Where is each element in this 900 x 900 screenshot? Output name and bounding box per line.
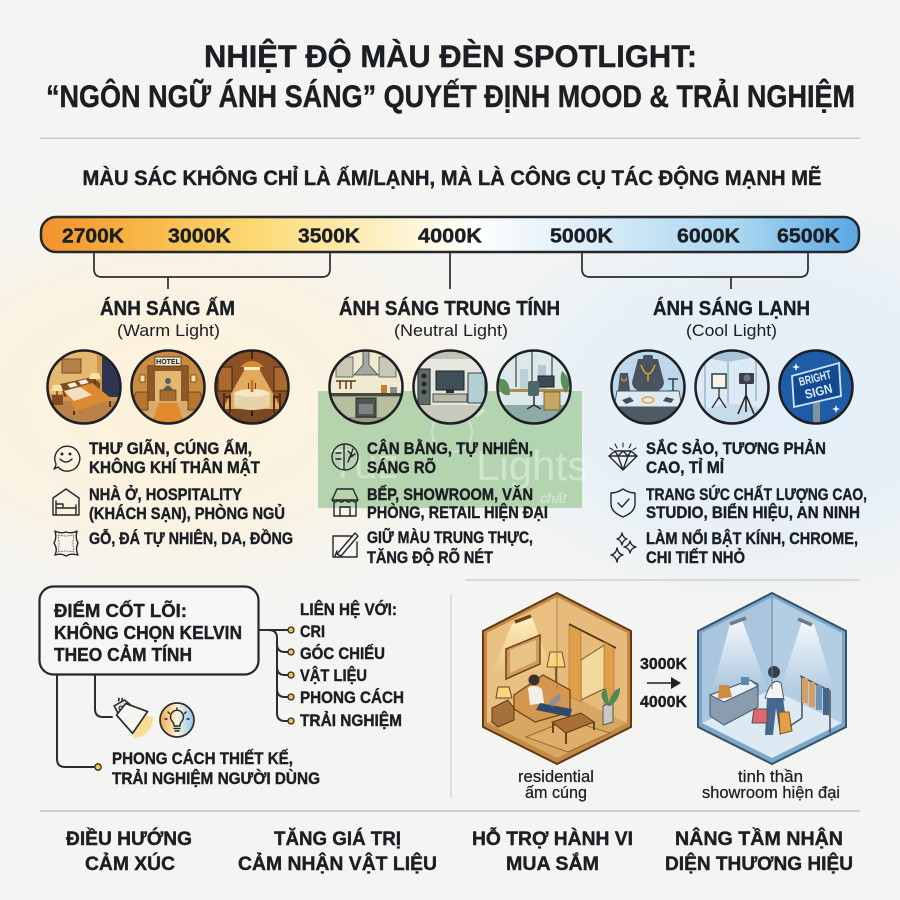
list: related factors: VẬT LIỆU <box>300 666 367 685</box>
title: NHIỆT ĐỘ MÀU ĐÈN SPOTLIGHT: <box>204 38 697 74</box>
text: cool light benefits: LÀM NỔI BẬT KÍNH, CHROME, <box>646 529 858 548</box>
heading: cool light: (Cool Light) <box>686 321 777 340</box>
footer benefits: CẢM XÚC <box>85 851 175 875</box>
text: neutral light benefits <box>367 439 548 567</box>
callout: key point <box>40 586 258 674</box>
text: design style and user experience: PHONG CÁCH THIẾT KẾ, <box>112 749 293 768</box>
heading: cool light <box>653 297 810 340</box>
text: cool light benefits: SẮC SẢO, TƯƠNG PHẢN <box>646 439 826 458</box>
label: 3000K to 4000K: 4000K <box>640 694 687 711</box>
subtitle: MÀU SÁC KHÔNG CHỈ LÀ ẤM/LẠNH, MÀ LÀ CÔNG CỤ TÁC ĐỘNG MẠNH MẼ <box>82 166 822 190</box>
heading: warm light: ÁNH SÁNG ẤM <box>100 297 235 320</box>
text: design style and user experience <box>112 749 320 788</box>
text: neutral light benefits: TĂNG ĐỘ RÕ NÉT <box>367 547 493 567</box>
color temperature scale bar: 2700K <box>62 224 124 248</box>
text: warm light benefits: GỖ, ĐÁ TỰ NHIÊN, DA, ĐỒNG <box>89 529 293 548</box>
footer benefits: TĂNG GIÁ TRỊ <box>274 827 401 850</box>
text: neutral light benefits: PHÒNG, RETAIL HIỆN ĐẠI <box>367 503 548 522</box>
text: neutral light benefits: BẾP, SHOWROOM, VĂN <box>367 485 533 504</box>
icon: smile bubble <box>54 446 80 471</box>
caption: residential: residential <box>518 768 594 786</box>
footer benefits: DIỆN THƯƠNG HIỆU <box>665 851 853 875</box>
icon: storefront <box>332 489 358 516</box>
icon: color pencil <box>333 533 358 557</box>
caption: modern showroom <box>702 768 840 802</box>
color temperature scale bar: 5000K <box>550 224 613 248</box>
watermark <box>318 391 588 508</box>
callout: key point: ĐIỂM CỐT LÕI: <box>54 600 187 621</box>
text: warm light benefits <box>89 438 293 548</box>
text: neutral light benefits: GIỮ MÀU TRUNG THỰC, <box>367 527 533 547</box>
heading: neutral light: (Neutral Light) <box>394 321 508 340</box>
color temperature scale bar: 6000K <box>677 224 740 248</box>
scene: photo studio <box>695 350 769 424</box>
list: related factors: TRẢI NGHIỆM <box>300 711 402 730</box>
icon: house with bed <box>53 489 79 515</box>
text: neutral light benefits: SÁNG RÕ <box>367 457 436 477</box>
illustration: modern showroom <box>698 593 846 764</box>
heading: neutral light <box>339 297 560 340</box>
title <box>46 38 855 114</box>
list: related factors: LIÊN HỆ VỚI: <box>300 600 397 619</box>
panel: cool light <box>609 297 867 567</box>
caption: modern showroom: tinh thần <box>738 768 803 786</box>
footer benefits: HỖ TRỢ HÀNH VI <box>472 826 633 850</box>
scene: hotel lobby <box>131 350 205 424</box>
icon: leather hide <box>54 531 78 556</box>
icon: sparkles <box>611 533 636 562</box>
icon: shield check <box>611 489 635 517</box>
range brackets <box>94 252 808 289</box>
icon: spotlight lamp <box>114 698 153 738</box>
text: neutral light benefits: CÂN BẰNG, TỰ NHIÊN, <box>367 439 533 458</box>
scene: bright sign: BRIGHT <box>797 367 833 389</box>
list: related factors: PHONG CÁCH <box>300 688 404 707</box>
scene: showroom living <box>413 350 487 424</box>
list: related factors: GÓC CHIẾU <box>300 644 385 663</box>
heading: warm light <box>100 297 235 340</box>
footer benefits: CẢM NHẬN VẬT LIỆU <box>238 851 437 875</box>
scene: bright sign <box>779 350 853 425</box>
footer benefits: MUA SẮM <box>506 851 599 875</box>
icon: light bulb warm to cool <box>160 703 194 737</box>
heading: cool light: ÁNH SÁNG LẠNH <box>653 297 810 320</box>
callout: key point: THEO CẢM TÍNH <box>54 644 192 665</box>
color temperature scale bar: 4000K <box>418 224 482 248</box>
icon: balance circle <box>332 444 358 470</box>
scene: office <box>497 350 571 424</box>
scene: hotel lobby: HOTEL <box>156 359 181 366</box>
connector tree: related factors <box>259 627 294 724</box>
watermark: chất <box>540 490 568 506</box>
scene: bedroom <box>47 350 121 424</box>
text: cool light benefits: CAO, TỈ MỈ <box>646 458 724 477</box>
text: warm light benefits: THƯ GIÃN, CÚNG ẤM, <box>89 438 252 458</box>
callout: key point: KHÔNG CHỌN KELVIN <box>54 622 242 643</box>
footer benefits: NÂNG TẦM NHẬN <box>675 826 843 850</box>
scene: restaurant table <box>215 350 289 424</box>
watermark: Tuz <box>330 440 398 487</box>
scene: bright sign: SIGN <box>803 381 834 402</box>
scene: kitchen <box>329 350 403 424</box>
connector: box to design style <box>57 675 101 770</box>
heading: neutral light: ÁNH SÁNG TRUNG TÍNH <box>339 297 560 320</box>
text: warm light benefits: (KHÁCH SẠN), PHÒNG NGỦ <box>89 504 285 523</box>
color temperature scale bar: 3500K <box>298 224 360 248</box>
color temperature scale bar <box>41 217 859 252</box>
label: 3000K to 4000K <box>640 656 687 711</box>
text: cool light benefits: CHI TIẾT NHỎ <box>646 548 745 567</box>
panel: neutral light <box>329 297 571 567</box>
caption: modern showroom: showroom hiện đại <box>702 784 840 802</box>
list: related factors <box>300 600 404 730</box>
color temperature scale bar: 6500K <box>777 224 840 248</box>
connector: box to lamp <box>95 675 112 717</box>
text: cool light benefits: STUDIO, BIỂN HIỆU, AN NINH <box>646 503 860 522</box>
watermark: Lights <box>476 442 588 489</box>
icon: sparkling diamond <box>609 443 637 470</box>
color temperature scale bar: 3000K <box>168 224 231 248</box>
illustration: cozy residential room <box>483 593 631 764</box>
footer benefits <box>66 826 853 875</box>
panel: warm light <box>47 297 293 556</box>
list: related factors: CRI <box>300 623 325 641</box>
text: warm light benefits: KHÔNG KHÍ THÂN MẬT <box>89 458 260 477</box>
footer benefits: ĐIỀU HƯỚNG <box>66 826 192 850</box>
label: 3000K to 4000K: 3000K <box>640 656 687 673</box>
caption: residential <box>518 768 594 802</box>
text: design style and user experience: TRẢI NGHIỆM NGƯỜI DÙNG <box>112 769 320 788</box>
text: cool light benefits <box>646 439 867 567</box>
scene: jewelry display <box>611 350 685 424</box>
caption: residential: ấm cúng <box>525 784 587 802</box>
heading: warm light: (Warm Light) <box>117 321 220 340</box>
text: warm light benefits: NHÀ Ở, HOSPITALITY <box>89 485 242 504</box>
